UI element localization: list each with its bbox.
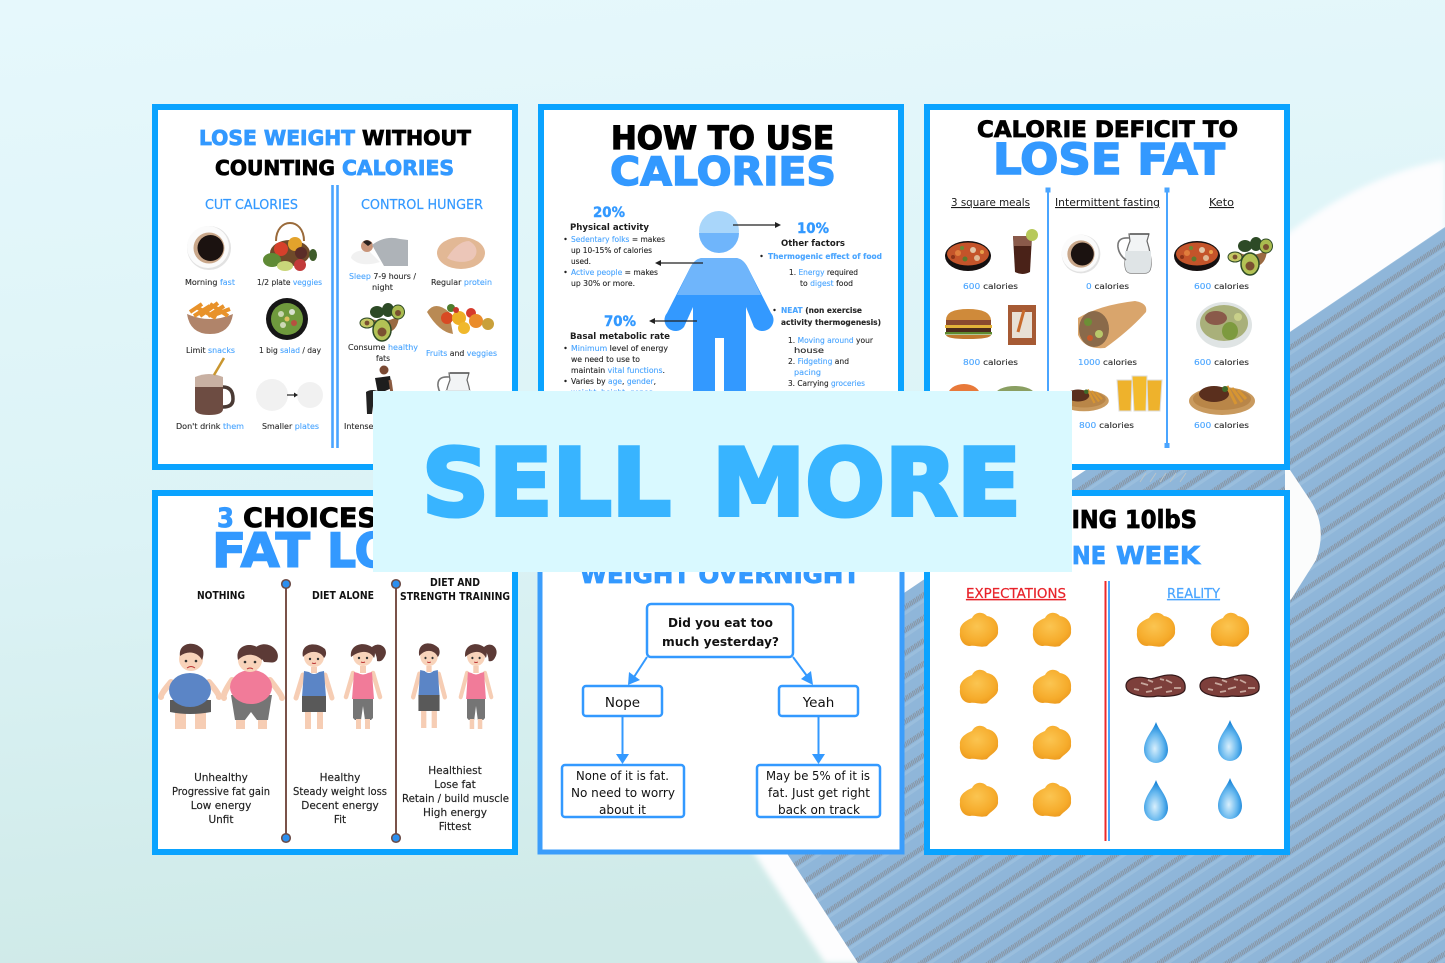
heading: reality: REALITY xyxy=(1167,587,1220,602)
flow box: may be five percent: fat. Just get right xyxy=(768,786,870,800)
heading: diet and strength training: DIET AND xyxy=(430,577,480,589)
flow box: may be five percent: May be 5% of it is xyxy=(766,769,870,783)
text block: diet and training outcomes: High energy xyxy=(423,807,487,819)
icon: rice bowl xyxy=(1174,241,1220,271)
text block: diet alone outcomes: Steady weight loss xyxy=(293,786,387,798)
icons: reality water drops xyxy=(1144,720,1242,821)
icon: coffee xyxy=(1062,235,1100,273)
column heading: intermittent fasting: Intermittent fasting xyxy=(1055,196,1160,209)
text block: other factors: Thermogenic effect of food xyxy=(768,252,882,261)
label: sleep: night xyxy=(372,282,394,292)
icon: water jug xyxy=(438,373,471,412)
scale white body xyxy=(700,160,1445,963)
text block: other factors: 1. Moving around your xyxy=(788,336,874,345)
text block: diet alone outcomes: Healthy xyxy=(320,772,360,784)
icon: fruits and veggies xyxy=(427,304,494,334)
scale white corner xyxy=(1285,470,1321,606)
panel: calorie deficit to lose fat xyxy=(927,107,1287,467)
text block: other factors: pacing xyxy=(794,368,821,377)
character: overweight woman xyxy=(224,644,282,729)
icon: steak plate xyxy=(1189,386,1255,415)
text block: physical activity: up 10-15% of calories xyxy=(571,246,652,255)
label: 800 calories: 800 calories xyxy=(963,357,1018,367)
label: healthy fats xyxy=(348,342,418,363)
text block: other factors: activity thermogenesis) xyxy=(781,318,881,327)
icon: beers xyxy=(1117,376,1162,411)
text block: other factors: house xyxy=(794,346,824,355)
icon: salad bowl xyxy=(1196,302,1252,348)
text block: diet and training outcomes: Lose fat xyxy=(434,779,476,791)
panel: weight overnight flowchart xyxy=(540,492,902,852)
banner text xyxy=(422,429,1021,537)
text block: physical activity: 20% xyxy=(593,205,625,221)
flow box: none of it is fat: No need to worry xyxy=(571,786,675,800)
text block: physical activity: Active people = makes xyxy=(571,268,658,277)
character: fit man xyxy=(413,643,445,728)
title xyxy=(610,119,836,195)
title: LOSE WEIGHT xyxy=(199,126,355,150)
character: overweight man xyxy=(161,644,219,729)
text block: basal metabolic rate: maintain vital functions. xyxy=(571,366,665,375)
column dividers xyxy=(1046,188,1170,448)
label: intense: Intense workouts xyxy=(344,421,412,431)
label: morning fast: Morning fast xyxy=(185,277,236,287)
text block: other factors: NEAT (non exercise xyxy=(781,306,862,315)
title xyxy=(1018,505,1202,570)
label: one big salad: 1 big salad / day xyxy=(259,345,321,355)
icons: reality muscle xyxy=(1126,675,1259,697)
title: HOW TO USE xyxy=(611,119,834,157)
heading: diet and strength training: STRENGTH TRAINING xyxy=(400,591,510,603)
label: 600 calories: 600 calories xyxy=(963,281,1018,291)
icons: reality fat nuggets xyxy=(1137,613,1249,647)
icon: snack bag xyxy=(1008,305,1036,345)
icon: vegetable basket xyxy=(263,223,317,271)
icon: fries bowl xyxy=(187,303,233,334)
title: LOSS xyxy=(327,524,457,579)
icon: cola glass xyxy=(1013,229,1038,274)
divider xyxy=(1104,581,1110,841)
column heading: keto: Keto xyxy=(1209,196,1234,209)
title xyxy=(199,126,471,180)
label: don't drink them: Don't drink them xyxy=(176,421,244,431)
title: CALORIE DEFICIT TO xyxy=(977,118,1238,143)
text block: other factors: Other factors xyxy=(781,238,845,248)
label: healthy fats: fats xyxy=(376,353,390,363)
text block: basal metabolic rate: we need to use to xyxy=(571,355,640,364)
text block: physical activity: up 30% or more. xyxy=(571,279,635,288)
icon: salad bowl xyxy=(266,298,308,340)
title: COUNTING xyxy=(215,156,335,180)
flow box: yeah: Yeah xyxy=(802,695,834,711)
text block: physical activity xyxy=(564,205,665,288)
label: fruits and veggies: Fruits and veggies xyxy=(426,348,497,358)
banner text: MORE xyxy=(712,429,1021,537)
label: 600 calories: 600 calories xyxy=(1194,357,1249,367)
icon: smaller plates xyxy=(256,379,323,411)
text block: diet alone outcomes: Fit xyxy=(334,814,346,826)
arrow: to nope xyxy=(628,657,647,685)
flow box: none of it is fat xyxy=(562,765,684,817)
label: smaller plates: Smaller plates xyxy=(262,421,319,431)
label: regular protein: Regular protein xyxy=(431,277,492,287)
icon: steak plate xyxy=(1059,390,1109,411)
text block: other factors xyxy=(760,221,882,388)
banner: sell more xyxy=(373,391,1072,572)
title: WEEK xyxy=(1116,541,1202,570)
label: sleep: Sleep 7-9 hours / xyxy=(349,271,416,281)
heading: diet alone: DIET ALONE xyxy=(312,590,374,602)
text block: other factors: 10% xyxy=(797,221,829,237)
arrow: legs to basal metabolic rate xyxy=(649,318,697,324)
column divider xyxy=(332,185,338,448)
heading: nothing: NOTHING xyxy=(197,590,245,602)
title: LOSE FAT xyxy=(993,135,1226,185)
icon: avocado xyxy=(360,303,404,341)
icon: sleeping person xyxy=(351,238,408,266)
character: man after diet xyxy=(296,644,332,729)
icon: avocado xyxy=(1228,237,1272,275)
panel: gaining ten pounds in one week xyxy=(927,493,1287,852)
text block: diet and training outcomes: Healthiest xyxy=(428,765,482,777)
icon: milkshake jar xyxy=(195,358,233,415)
title: 3 xyxy=(217,503,234,534)
text block: diet and training outcomes xyxy=(402,765,509,833)
text block: basal metabolic rate: 70% xyxy=(604,314,636,330)
flow box: yeah xyxy=(779,686,858,716)
title xyxy=(212,503,457,579)
label: 1000 calories: 1000 calories xyxy=(1078,357,1137,367)
icon: athlete xyxy=(366,366,392,414)
flow box: none of it is fat: None of it is fat. xyxy=(576,769,669,783)
title xyxy=(977,118,1238,185)
column dividers xyxy=(282,580,400,842)
text block: other factors: 3. Carrying groceries xyxy=(788,379,865,388)
label: healthy fats: Consume healthy xyxy=(348,342,418,352)
panel: lose weight without counting calories xyxy=(155,107,515,467)
flow box: none of it is fat: about it xyxy=(599,803,646,817)
flow box: question: Did you eat too xyxy=(668,615,773,630)
text block: diet and training outcomes: Fittest xyxy=(439,821,471,833)
label: 0 calories: 0 calories xyxy=(1086,281,1129,291)
title: FAT xyxy=(212,524,310,579)
text block: other factors: to digest food xyxy=(800,279,853,288)
panel: three choices for fat loss xyxy=(155,493,515,852)
icon: coffee xyxy=(187,226,231,270)
icons: expectation fat nuggets xyxy=(960,613,1071,817)
text block: nothing outcomes: Low energy xyxy=(191,800,251,812)
text block: diet alone outcomes xyxy=(293,772,387,826)
label: 600 calories: 600 calories xyxy=(1194,420,1249,430)
label: sleep xyxy=(349,271,416,292)
banner text: SELL xyxy=(422,429,671,537)
character: woman after diet xyxy=(346,644,386,729)
text block: physical activity: used. xyxy=(571,257,591,266)
text block: basal metabolic rate: Basal metabolic rate xyxy=(570,331,670,341)
flow box: question: much yesterday? xyxy=(662,634,779,649)
flow box: may be five percent xyxy=(757,765,880,817)
heading: diet and strength training xyxy=(400,577,510,603)
icon: burrito wrap xyxy=(1078,301,1146,348)
flow box: nope xyxy=(583,686,662,716)
icon: burger xyxy=(945,309,992,339)
arrow: torso to physical activity xyxy=(655,260,703,266)
scale markings between panels xyxy=(1140,473,1186,482)
striped blue scale mat xyxy=(700,227,1445,963)
text block: nothing outcomes: Unfit xyxy=(208,814,234,826)
text block: physical activity: Sedentary folks = makes xyxy=(571,235,665,244)
text block: nothing outcomes xyxy=(172,772,270,826)
heading: expectations: EXPECTATIONS xyxy=(966,587,1066,602)
human figure chart xyxy=(664,211,774,400)
text block: basal metabolic rate xyxy=(564,314,670,397)
icon: water jug xyxy=(1118,234,1151,273)
title: LOSING xyxy=(1023,505,1117,534)
flow box: nope: Nope xyxy=(605,695,640,711)
heading: control hunger: CONTROL HUNGER xyxy=(361,198,483,213)
text block: basal metabolic rate: Minimum level of energy xyxy=(571,344,668,353)
label: 800 calories: 800 calories xyxy=(1079,420,1134,430)
text block: basal metabolic rate: weight, height, genes. xyxy=(571,388,655,397)
label: limit snacks: Limit snacks xyxy=(186,345,235,355)
text block: diet and training outcomes: Retain / build muscle xyxy=(402,793,509,805)
character: fit woman xyxy=(461,644,497,729)
title: CALORIES xyxy=(610,150,836,195)
text block: other factors: 1. Energy required xyxy=(789,268,858,277)
arrow: head to other factors xyxy=(733,222,781,228)
flow box: question xyxy=(647,604,793,657)
heading: cut calories: CUT CALORIES xyxy=(205,198,298,213)
title: IN ONE xyxy=(1018,541,1106,570)
text block: diet alone outcomes: Decent energy xyxy=(301,800,379,812)
flow box: may be five percent: back on track xyxy=(778,803,860,817)
text block: nothing outcomes: Unhealthy xyxy=(194,772,248,784)
text block: physical activity: Physical activity xyxy=(570,222,650,232)
title: WEIGHT OVERNIGHT xyxy=(580,563,860,589)
icon: rice bowl xyxy=(945,241,991,271)
panel: how to use calories xyxy=(541,107,901,467)
text block: nothing outcomes: Progressive fat gain xyxy=(172,786,270,798)
arrow: nope to answer xyxy=(616,716,629,764)
text block: other factors: 2. Fidgeting and xyxy=(788,357,849,366)
title: 10lbS xyxy=(1125,505,1197,534)
column heading: three square meals: 3 square meals xyxy=(951,196,1030,209)
title: WITHOUT xyxy=(362,126,471,150)
label: 600 calories: 600 calories xyxy=(1194,281,1249,291)
label: half plate veggies: 1/2 plate veggies xyxy=(257,277,322,287)
arrow: to yeah xyxy=(793,657,813,685)
icon: chicken on board xyxy=(437,237,485,269)
title: CALORIES xyxy=(342,156,454,180)
title: CHOICES xyxy=(243,503,377,534)
arrow: yeah to answer xyxy=(812,716,825,764)
text block: basal metabolic rate: Varies by age, gender, xyxy=(571,377,656,386)
icon: salmon and greens xyxy=(948,384,1035,406)
